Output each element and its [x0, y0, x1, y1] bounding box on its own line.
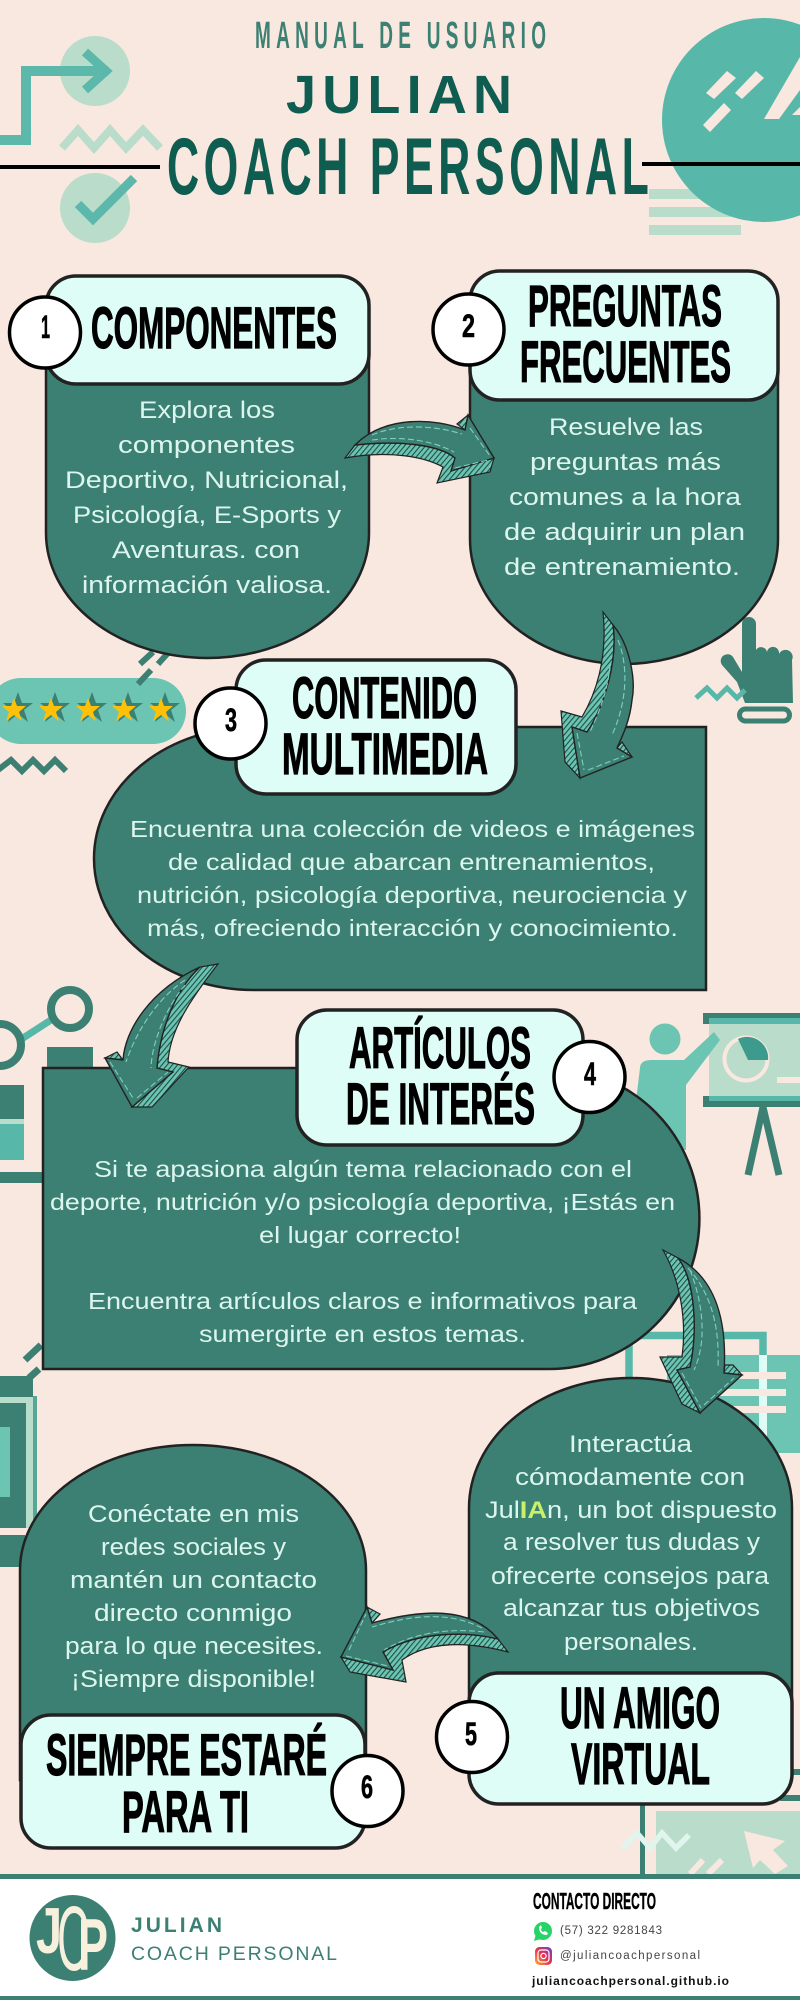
text: siempre body: para lo que necesites.	[65, 1633, 323, 1660]
text: articulos body: deporte, nutrición y/o psicología deportiva, ¡Estás en	[50, 1189, 675, 1215]
text: phone: (57) 322 9281843	[560, 1925, 662, 1937]
footer	[0, 1874, 800, 2000]
number badge 2: 2	[462, 308, 475, 344]
text: amigo body: cómodamente con	[515, 1464, 745, 1491]
arrow: step 5 to 6	[341, 1607, 508, 1682]
number badge 1: 1	[41, 309, 50, 345]
icon: pointing hand	[696, 617, 793, 721]
icon: light zigzag	[62, 130, 160, 148]
logo: J	[36, 1894, 62, 1967]
number badge 2	[433, 294, 504, 365]
text: componentes body: componentes	[118, 432, 295, 459]
decor: cursor bottom right	[622, 1769, 800, 1875]
text: amigo body	[485, 1431, 777, 1656]
text: multimedia body: nutrición, psicología deportiva, neurociencia y	[137, 882, 688, 908]
text: componentes body	[65, 397, 348, 599]
heading: articulos de interes: ARTÍCULOS	[349, 1016, 531, 1081]
decor: presenter with board	[630, 1013, 800, 1175]
text: preguntas body: preguntas más	[530, 449, 721, 476]
text: amigo body: ofrecerte consejos para	[491, 1563, 770, 1590]
text: amigo body: a resolver tus dudas y	[503, 1529, 760, 1556]
logo: P	[78, 1905, 108, 1986]
number badge 6	[332, 1756, 403, 1826]
text: articulos body: Encuentra artículos claros e informativos para	[88, 1288, 637, 1314]
heading: componentes: COMPONENTES	[91, 296, 337, 361]
heading: articulos de interes	[346, 1016, 535, 1137]
heading: un amigo virtual	[560, 1676, 720, 1797]
header box 2	[470, 271, 778, 400]
footer brand name: JULIAN	[131, 1914, 222, 1937]
header box 6	[21, 1715, 365, 1848]
text: multimedia body	[130, 816, 695, 941]
text: siempre body: directo conmigo	[94, 1600, 292, 1627]
text: multimedia body: de calidad que abarcan entrenamientos,	[168, 849, 655, 875]
text: preguntas body: Resuelve las	[549, 414, 703, 441]
text: amigo body: Interactúa	[569, 1431, 693, 1458]
stars	[2, 692, 180, 722]
icon: whatsapp	[534, 1922, 552, 1941]
text: website: juliancoachpersonal.github.io	[531, 1974, 729, 1988]
text: amigo body: personales.	[564, 1629, 698, 1656]
decor: left frame	[0, 1345, 41, 1567]
panel: un amigo virtual	[436, 1378, 792, 1804]
icon: check in circle	[60, 173, 134, 243]
heading: siempre estare para ti	[46, 1723, 327, 1845]
text: componentes body: Deportivo, Nutricional,	[65, 467, 348, 494]
heading: siempre estare para ti: PARA TI	[122, 1780, 249, 1845]
text: siempre body: ¡Siempre disponible!	[71, 1666, 316, 1693]
number badge 3	[195, 688, 266, 759]
footer brand name: COACH PERSONAL	[131, 1943, 337, 1965]
header box 3	[236, 660, 516, 794]
heading: preguntas frecuentes	[520, 274, 731, 395]
text: multimedia body: Encuentra una colección de videos e imágenes	[130, 816, 695, 842]
heading: articulos de interes: DE INTERÉS	[346, 1072, 535, 1137]
contact heading: CONTACTO DIRECTO	[533, 1888, 656, 1914]
text: articulos body: Si te apasiona algún tema relacionado con el	[94, 1156, 632, 1182]
header box 4	[297, 1010, 583, 1145]
title line: manual de usuario: MANUAL DE USUARIO	[255, 15, 546, 57]
title line: coach personal: COACH PERSONAL	[167, 121, 649, 211]
header box 1	[46, 276, 369, 384]
text: instagram handle: @juliancoachpersonal	[560, 1950, 700, 1962]
number badge 3: 3	[225, 702, 237, 738]
text: componentes body: Aventuras. con	[112, 537, 300, 564]
text: siempre body: Conéctate en mis	[88, 1501, 299, 1528]
decor: network circles and blocks	[0, 990, 93, 1183]
number badge 6: 6	[361, 1769, 373, 1805]
icon: large circle with stripes	[649, 18, 800, 235]
arrow: step 3 to 4	[105, 964, 218, 1107]
logo	[30, 1888, 116, 1990]
decor: rating pill with stars	[0, 652, 186, 744]
text: preguntas body	[504, 414, 745, 581]
panel: articulos de interes	[43, 1010, 699, 1369]
panel: preguntas frecuentes	[433, 271, 778, 664]
panel: contenido multimedia	[94, 660, 706, 990]
decor: chart frame right	[629, 1336, 800, 1453]
footer brand name	[131, 1914, 337, 1965]
panel: componentes	[10, 276, 369, 658]
title line: julian: JULIAN	[286, 65, 512, 125]
logo: C	[57, 1888, 89, 1990]
text: articulos body	[50, 1156, 675, 1347]
heading: contenido multimedia: MULTIMEDIA	[282, 722, 488, 787]
number badge 4	[554, 1042, 625, 1112]
text: articulos body: el lugar correcto!	[259, 1222, 461, 1248]
text: articulos body: sumergirte en estos temas.	[199, 1321, 526, 1347]
text: multimedia body: más, ofreciendo interacción y conocimiento.	[147, 915, 678, 941]
text: componentes body: Psicología, E-Sports y	[73, 502, 341, 529]
icon: arrow in circle	[0, 36, 130, 140]
panel: siempre estare para ti	[20, 1445, 403, 1848]
number badge 5	[436, 1702, 508, 1772]
heading: contenido multimedia	[282, 666, 488, 787]
text: componentes body: información valiosa.	[82, 572, 332, 599]
text: amigo body: JulIAn, un bot dispuesto	[485, 1497, 777, 1524]
number badge 1	[10, 297, 80, 368]
text: siempre body	[65, 1501, 323, 1693]
number badge 5: 5	[465, 1716, 477, 1752]
text: siempre body: redes sociales y	[101, 1534, 286, 1561]
number badge 4: 4	[584, 1056, 596, 1092]
arrow: step 2 to 3	[561, 612, 633, 778]
heading: contenido multimedia: CONTENIDO	[292, 666, 477, 731]
text: preguntas body: de entrenamiento.	[504, 554, 740, 581]
icon: instagram	[535, 1947, 552, 1965]
arrow: step 4 to 5	[660, 1250, 742, 1413]
text: siempre body: mantén un contacto	[70, 1567, 317, 1594]
arrow: step 1 to 2	[345, 415, 494, 483]
header box 5	[469, 1673, 792, 1804]
text: preguntas body: de adquirir un plan	[504, 519, 745, 546]
title block	[167, 15, 649, 211]
heading: siempre estare para ti: SIEMPRE ESTARÉ	[46, 1723, 327, 1788]
text: amigo body: alcanzar tus objetivos	[503, 1595, 760, 1622]
icon: dark zigzag	[0, 760, 66, 771]
text: preguntas body: comunes a la hora	[509, 484, 742, 511]
text: componentes body: Explora los	[139, 397, 275, 424]
